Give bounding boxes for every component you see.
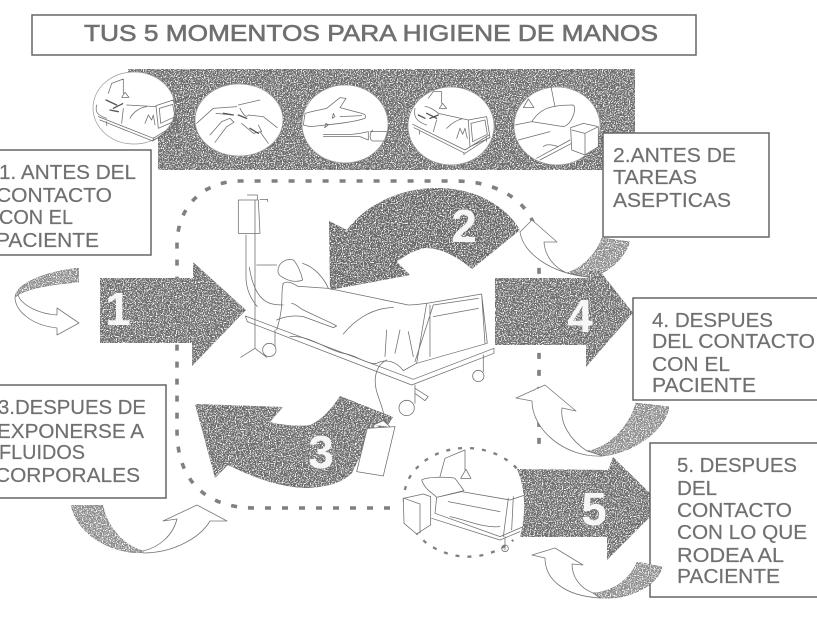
wheels xyxy=(275,330,483,403)
arrow: moment 1 xyxy=(100,262,246,366)
box: moment 5: CONTACTO xyxy=(677,500,792,522)
arrow: moment 4: 4 xyxy=(567,290,593,342)
box: moment 2: ASEPTICAS xyxy=(613,190,731,212)
arrow: moment 5: 5 xyxy=(581,483,607,535)
box: moment 5: DEL xyxy=(677,478,717,500)
arrow: moment 5 xyxy=(517,457,662,560)
arrow: moment 4 xyxy=(495,271,633,367)
box: moment 2 xyxy=(603,133,769,237)
box: moment 4 xyxy=(633,298,817,400)
scene circle 5: empty bed and bedside table xyxy=(514,87,600,165)
box: moment 4: CON EL xyxy=(652,354,730,376)
scene circle 4: patient in bed xyxy=(408,87,494,165)
arrow: moment 1: 1 xyxy=(105,283,131,335)
arrow: moment 2: 2 xyxy=(451,200,477,252)
IV stand and bag xyxy=(238,195,268,357)
box: moment 5: RODEA AL xyxy=(677,545,784,567)
curved arrow: from box 3 xyxy=(71,505,227,553)
curved arrow: from box 4 xyxy=(516,385,669,456)
box: moment 4: PACIENTE xyxy=(652,375,756,397)
arrow: moment 3 xyxy=(195,396,393,488)
box: moment 2: 2.ANTES DE xyxy=(613,145,736,167)
box: moment 5 xyxy=(650,443,817,597)
box: moment 3: FLUIDOS xyxy=(0,442,85,464)
gray band background xyxy=(128,69,635,170)
drainage tube and bag xyxy=(375,360,387,422)
box: moment 3 xyxy=(0,385,166,498)
box: moment 5: CON LO QUE xyxy=(677,522,807,544)
arrow: moment 2 xyxy=(329,188,520,290)
box: moment 4: 4. DESPUES xyxy=(652,310,773,332)
scene circle 2: hands with gauze xyxy=(195,84,283,156)
box: moment 2: TAREAS xyxy=(613,167,697,189)
panel: gray band with five moment scenes xyxy=(93,69,635,170)
arrow: moment 3: 3 xyxy=(308,426,334,478)
box: moment 4: DEL CONTACTO xyxy=(652,331,815,353)
curved arrow: from box 5 xyxy=(532,548,662,598)
title xyxy=(32,15,696,55)
illustration: patient in bed with IV and drainage bag xyxy=(238,195,494,476)
title: TUS 5 MOMENTOS PARA HIGIENE DE MANOS xyxy=(84,20,658,46)
box: moment 1: CON EL xyxy=(0,207,73,229)
bed frame xyxy=(245,316,494,385)
illustration: empty bed in dashed circle xyxy=(403,448,525,557)
scene circle 1: patient in bed xyxy=(93,72,179,144)
box: moment 1 xyxy=(0,150,151,255)
patient xyxy=(249,260,337,330)
box: moment 5: PACIENTE xyxy=(677,566,780,588)
dashed care-zone loop around patient xyxy=(177,181,539,508)
scene circle 3: gloved hand and syringe xyxy=(302,85,388,163)
box: moment 3: EXPONERSE A xyxy=(0,421,145,443)
curved arrow: toward moment 1 arrow xyxy=(15,268,79,335)
box: moment 1: 1. ANTES DEL xyxy=(0,162,136,184)
box: moment 3: 3.DESPUES DE xyxy=(0,397,146,419)
blanket xyxy=(290,288,427,371)
box: moment 5: 5. DESPUES xyxy=(677,455,797,477)
curved arrow: from moment 2 box xyxy=(520,220,630,277)
